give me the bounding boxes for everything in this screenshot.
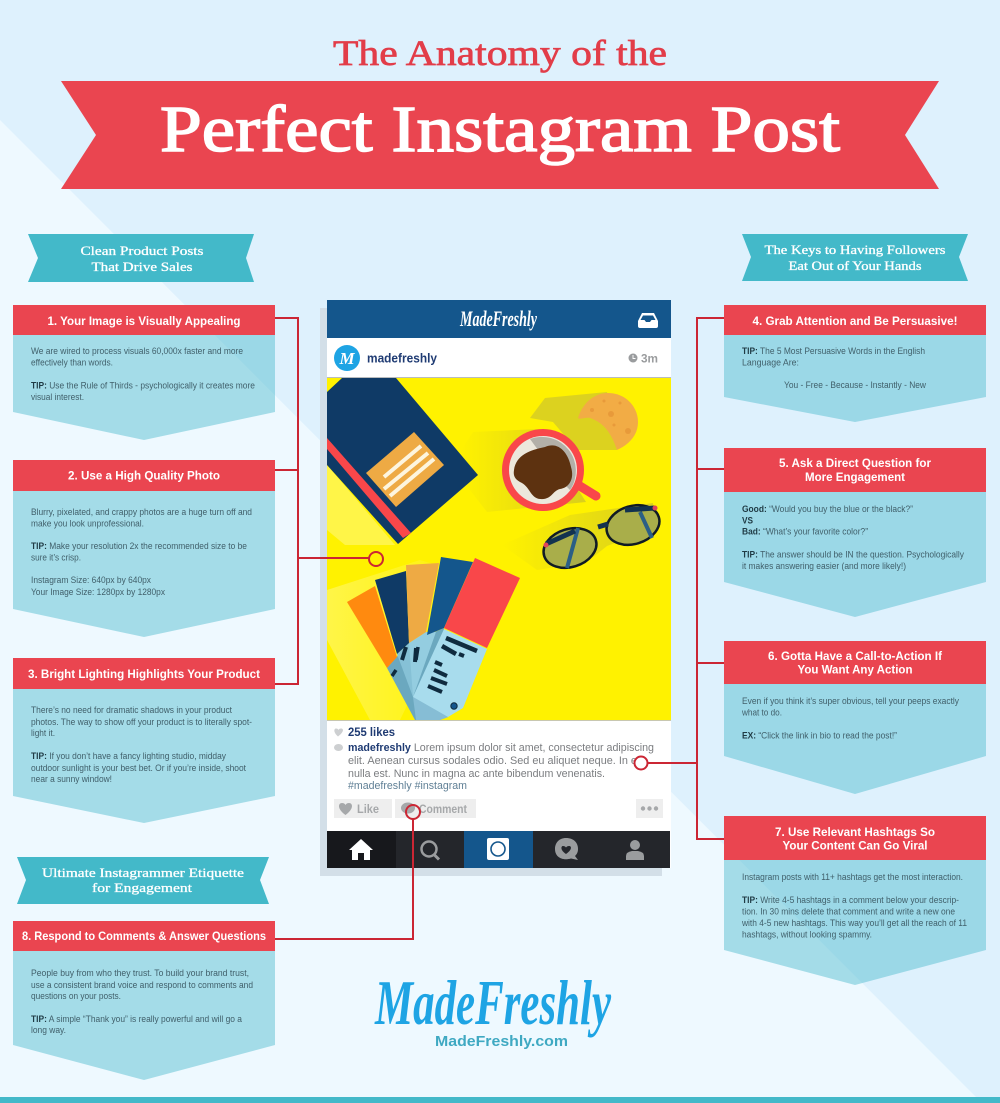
panel: tip 3: TIP: If you don’t have a fancy lighting studio, midday bbox=[31, 751, 227, 761]
panel: tip 1: We are wired to process visuals 60,000x faster and more bbox=[31, 346, 243, 356]
panel: tip 4 bbox=[724, 305, 986, 422]
bottom navigation bar bbox=[327, 831, 670, 868]
panel: tip 5: it makes answering easier (and more likely!) bbox=[742, 561, 906, 571]
icon: inbox bbox=[638, 313, 658, 328]
phone header bar bbox=[327, 300, 671, 338]
panel: tip 5 bbox=[724, 448, 986, 617]
panel: tip 8: use a consistent brand voice and respond to comments and bbox=[31, 980, 253, 990]
panel: tip 7: tion. In 30 mins delete that comment and write a new one bbox=[742, 906, 955, 916]
marker: comment bbox=[406, 805, 420, 819]
ribbon: The Keys to Having Followers: Eat Out of Your Hands bbox=[788, 259, 922, 273]
logo: MadeFreshly bbox=[374, 967, 611, 1050]
panel: tip 8: questions on your posts. bbox=[31, 991, 121, 1001]
panel: tip 8: People buy from who they trust. To build your brand trust, bbox=[31, 968, 249, 978]
icon: search bbox=[422, 842, 439, 860]
panel: tip 7: with 4-5 new hashtags. This way you’ll get all the reach of 11 bbox=[741, 918, 967, 928]
panel: tip 4: TIP: The 5 Most Persuasive Words in the English bbox=[742, 346, 925, 356]
phone header bar: MadeFreshly bbox=[459, 306, 537, 331]
panel: tip 3: outdoor sunlight is your best bet. Or if you’re inside, shoot bbox=[31, 763, 247, 773]
panel: tip 7: 7. Use Relevant Hashtags So bbox=[775, 827, 935, 839]
caption text: nulla est. Nunc in magna ac ante bibendum venenatis. bbox=[348, 768, 605, 780]
panel: tip 2: Instagram Size: 640px by 640px bbox=[31, 575, 152, 585]
panel: tip 2: make you look unprofessional. bbox=[31, 518, 144, 528]
panel: tip 3: photos. The way to show off your product is to literally spot- bbox=[31, 717, 252, 727]
panel: tip 5: Good: “Would you buy the blue or the black?” bbox=[742, 504, 913, 514]
panel: tip 5: VS bbox=[742, 516, 753, 526]
post author row bbox=[334, 345, 658, 371]
panel: tip 1 bbox=[13, 305, 275, 440]
connector lines bbox=[275, 318, 724, 939]
panel: tip 7: Your Content Can Go Viral bbox=[782, 840, 928, 852]
logo: MadeFreshly: MadeFreshly bbox=[374, 967, 611, 1038]
caption text bbox=[334, 742, 654, 792]
panel: tip 6: 6. Gotta Have a Call-to-Action If bbox=[768, 651, 942, 663]
title bbox=[61, 33, 939, 189]
product photo bbox=[327, 378, 671, 720]
post author row: madefreshly bbox=[367, 352, 437, 366]
button: comment: Comment bbox=[419, 804, 467, 816]
title banner bbox=[61, 81, 939, 189]
post author row: M bbox=[338, 349, 355, 368]
panel: tip 2: sure it’s crisp. bbox=[31, 552, 81, 562]
ribbon: Clean Product Posts: That Drive Sales bbox=[92, 260, 193, 274]
button: more bbox=[636, 799, 663, 818]
panel: tip 8: 8. Respond to Comments & Answer Questions bbox=[22, 931, 266, 943]
icon: small comment bubble bbox=[334, 744, 343, 751]
panel: tip 2: TIP: Make your resolution 2x the recommended size to be bbox=[31, 541, 247, 551]
panel: tip 1: TIP: Use the Rule of Thirds - psychologically it creates more bbox=[31, 380, 255, 390]
logo: MadeFreshly: MadeFreshly.com bbox=[435, 1033, 568, 1050]
panel: tip 7: TIP: Write 4-5 hashtags in a comment below your descrip- bbox=[742, 895, 959, 905]
ribbon: The Keys to Having Followers: The Keys to Having Followers bbox=[764, 243, 946, 257]
panel: tip 6: EX: “Click the link in bio to read the post!” bbox=[742, 730, 897, 740]
panel: tip 6: Even if you think it’s super obvious, tell your peeps exactly bbox=[742, 696, 960, 706]
panel: tip 5: Bad: “What’s your favorite color?” bbox=[742, 526, 868, 536]
ribbon: Clean Product Posts bbox=[28, 234, 254, 282]
ribbon: Clean Product Posts: Clean Product Posts bbox=[80, 244, 204, 258]
icon: camera bbox=[487, 838, 509, 860]
panel: tip 6: You Want Any Action bbox=[798, 664, 912, 676]
action buttons bbox=[334, 799, 663, 818]
phone mockup bbox=[320, 300, 671, 876]
panel: tip 1: visual interest. bbox=[31, 392, 84, 402]
title banner: Perfect Instagram Post bbox=[160, 93, 840, 166]
panel: tip 4: You - Free - Because - Instantly - New bbox=[784, 380, 927, 390]
panel: tip 7 bbox=[724, 816, 986, 985]
panel: tip 8: long way. bbox=[31, 1025, 66, 1035]
panel: tip 7: Instagram posts with 11+ hashtags get the most interaction. bbox=[742, 872, 963, 882]
ribbon: Ultimate Instagrammer Etiquette bbox=[17, 857, 269, 904]
panel: tip 3: 3. Bright Lighting Highlights Your Product bbox=[28, 669, 260, 681]
panel: tip 5: 5. Ask a Direct Question for bbox=[779, 458, 932, 470]
panel: tip 5: TIP: The answer should be IN the question. Psychologically bbox=[742, 550, 965, 560]
panel: tip 3: near a sunny window! bbox=[31, 774, 112, 784]
marker: caption bbox=[634, 756, 648, 770]
notebook bbox=[327, 378, 478, 544]
coffee cup bbox=[502, 429, 596, 511]
panel: tip 8 bbox=[13, 921, 275, 1080]
panel: tip 1: 1. Your Image is Visually Appealing bbox=[48, 316, 240, 328]
panel: tip 2: 2. Use a High Quality Photo bbox=[68, 470, 220, 482]
marker: photo bbox=[369, 552, 383, 566]
panel: tip 1: effectively than words. bbox=[31, 358, 113, 368]
panel: tip 2 bbox=[13, 460, 275, 637]
panel: tip 3 bbox=[13, 658, 275, 823]
panel: tip 4: Language Are: bbox=[742, 358, 799, 368]
button: like bbox=[334, 799, 392, 818]
caption text: #madefreshly #instagram bbox=[348, 780, 467, 792]
panel: tip 6: what to do. bbox=[741, 708, 782, 718]
title line: The Anatomy of the: The Anatomy of the bbox=[333, 33, 667, 73]
caption text: madefreshly Lorem ipsum dolor sit amet, consectetur adipiscing bbox=[348, 742, 654, 754]
likes row: 255 likes bbox=[348, 727, 395, 739]
ribbon: Ultimate Instagrammer Etiquette: for Engagement bbox=[92, 881, 193, 895]
icon: profile bbox=[626, 840, 644, 860]
icon: heart bubble bbox=[555, 838, 578, 860]
sunglasses bbox=[502, 499, 664, 574]
panel: tip 2: Blurry, pixelated, and crappy photos are a huge turn off and bbox=[31, 507, 252, 517]
ribbon: The Keys to Having Followers bbox=[742, 234, 968, 281]
ribbon: Ultimate Instagrammer Etiquette: Ultimate Instagrammer Etiquette bbox=[42, 866, 245, 880]
panel: tip 4: 4. Grab Attention and Be Persuasive! bbox=[752, 316, 958, 328]
button: comment bbox=[395, 799, 476, 818]
button: like: Like bbox=[357, 804, 379, 816]
panel: tip 5: More Engagement bbox=[805, 472, 905, 484]
colour swatch fan bbox=[347, 557, 520, 720]
cookie bbox=[530, 392, 638, 450]
panel: tip 6 bbox=[724, 641, 986, 794]
panel: tip 8: TIP: A simple “Thank you” is really powerful and will go a bbox=[31, 1014, 242, 1024]
post author row: 3m bbox=[641, 352, 658, 366]
icon: home bbox=[349, 839, 373, 860]
panel: tip 3: There’s no need for dramatic shadows in your product bbox=[31, 705, 233, 715]
panel: tip 3: light it. bbox=[31, 728, 55, 738]
panel: tip 7: hashtags, without looking spammy. bbox=[742, 930, 872, 940]
icon: small heart bbox=[334, 728, 343, 736]
caption text: elit. Aenean cursus sodales odio. Sed eu aliquet neque. In et bbox=[348, 755, 641, 767]
panel: tip 2: Your Image Size: 1280px by 1280px bbox=[31, 587, 166, 597]
